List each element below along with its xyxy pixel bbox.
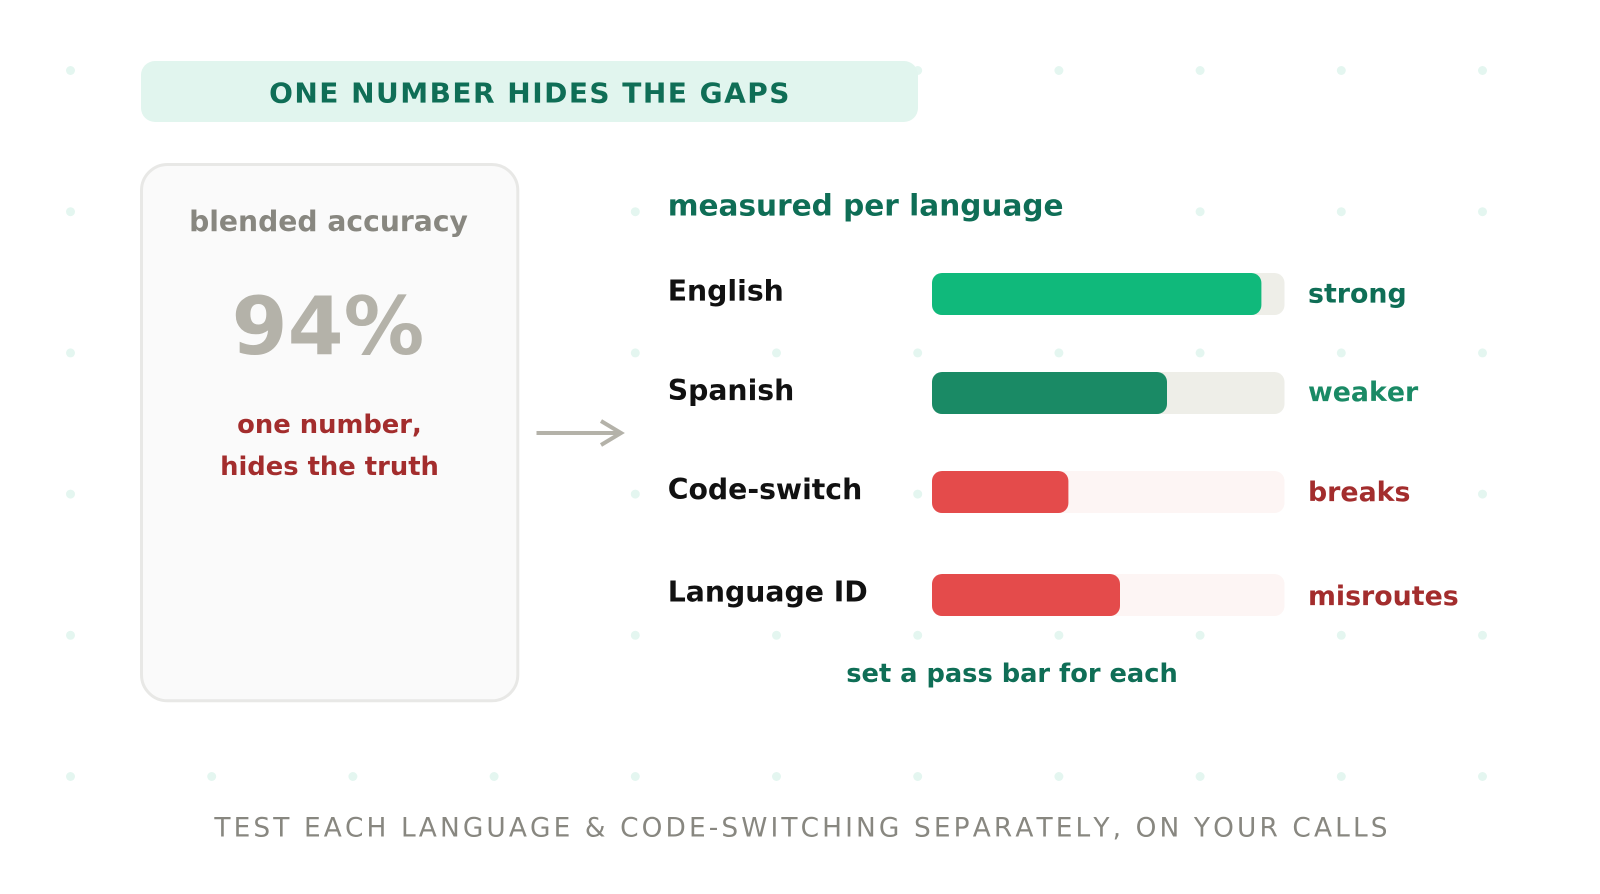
blended accuracy label: blended accuracy — [189, 205, 468, 238]
arrow — [536, 421, 621, 445]
row: Code-switch — [668, 471, 1410, 513]
row: Code-switch: breaks — [1308, 477, 1410, 508]
row: Spanish — [668, 372, 1419, 414]
big number: 94%: 94% — [232, 279, 424, 373]
row: Language ID: Language ID — [668, 576, 868, 608]
row: Language ID — [668, 574, 1459, 616]
title banner: ONE NUMBER HIDES THE GAPS — [269, 76, 791, 110]
row: Spanish: weaker — [1308, 377, 1419, 408]
row: English — [668, 273, 1407, 315]
row: Spanish: Spanish — [668, 374, 794, 407]
row: English: strong — [1308, 278, 1407, 310]
takeaway: set a pass bar: set a pass bar for each — [846, 659, 1178, 689]
row: English: English — [668, 274, 784, 307]
warning text: one number, — [237, 410, 422, 440]
row: Language ID: misroutes — [1308, 581, 1459, 612]
title banner — [141, 61, 918, 122]
row: Code-switch: Code-switch — [668, 473, 862, 506]
warning text — [220, 410, 439, 482]
panel: blended accuracy — [142, 164, 518, 701]
footer caption: TEST EACH LANGUAGE & CODE-SWITCHING SEPARATELY, ON YOUR CALLS — [213, 813, 1391, 844]
warning text: hides the truth — [220, 452, 439, 482]
heading: measured per language: measured per language — [668, 188, 1064, 222]
